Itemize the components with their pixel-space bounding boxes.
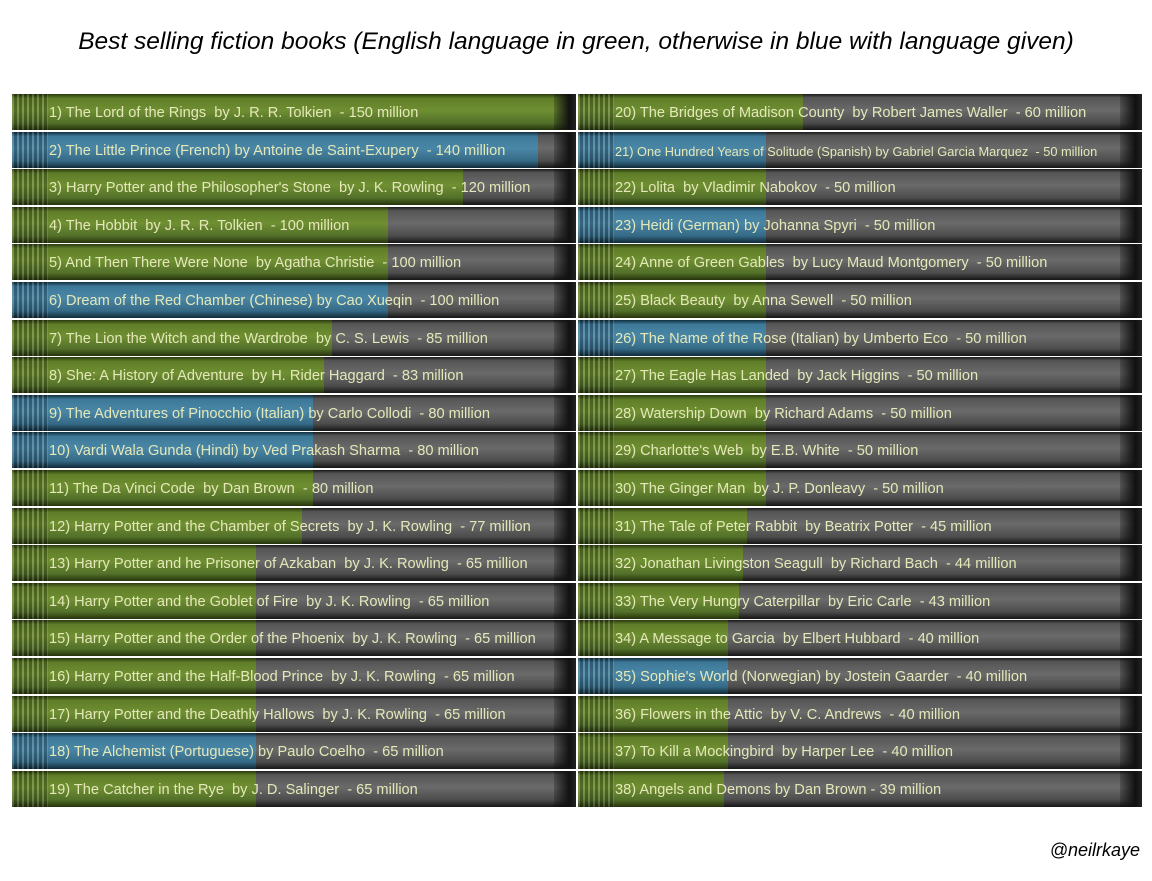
panel: left column of book spines: 17) Harry Potter and the Deathly Hallows by J. K. Rowling - 65 million — [49, 707, 506, 723]
panel: left column of book spines: 18) The Alchemist (Portuguese) by Paulo Coelho - 65 million — [49, 744, 444, 760]
panel: left column of book spines: 3) Harry Potter and the Philosopher's Stone by J. K. Rowling - 120 million — [49, 180, 530, 196]
panel: left column of book spines: 7) The Lion the Witch and the Wardrobe by C. S. Lewis - 85 million — [49, 331, 488, 347]
panel: right column of book spines: 22) Lolita by Vladimir Nabokov - 50 million — [615, 180, 896, 196]
panel: right column of book spines: 23) Heidi (German) by Johanna Spyri - 50 million — [615, 218, 935, 234]
panel: left column of book spines: 15) Harry Potter and the Order of the Phoenix by J. K. Rowling - 65 million — [49, 631, 536, 647]
panel: right column of book spines: 36) Flowers in the Attic by V. C. Andrews - 40 million — [615, 707, 960, 723]
panel: left column of book spines: 9) The Adventures of Pinocchio (Italian) by Carlo Collodi - 80 million — [49, 406, 490, 422]
panel: left column of book spines: 19) The Catcher in the Rye by J. D. Salinger - 65 million — [49, 782, 418, 798]
panel: left column of book spines: 2) The Little Prince (French) by Antoine de Saint-Exupery - 140 million — [49, 143, 505, 159]
panel: left column of book spines: 12) Harry Potter and the Chamber of Secrets by J. K. Rowling - 77 million — [49, 519, 531, 535]
panel: right column of book spines: 37) To Kill a Mockingbird by Harper Lee - 40 million — [615, 744, 953, 760]
panel: left column of book spines: 14) Harry Potter and the Goblet of Fire by J. K. Rowling - 65 million — [49, 594, 489, 610]
panel: left column of book spines — [12, 94, 576, 807]
panel: right column of book spines: 35) Sophie's World (Norwegian) by Jostein Gaarder - 40 million — [615, 669, 1027, 685]
panel: right column of book spines — [578, 94, 1142, 807]
panel: left column of book spines: 5) And Then There Were None by Agatha Christie - 100 million — [49, 255, 461, 271]
panel: right column of book spines: 26) The Name of the Rose (Italian) by Umberto Eco - 50 million — [615, 331, 1027, 347]
panel: right column of book spines: 33) The Very Hungry Caterpillar by Eric Carle - 43 million — [615, 594, 990, 610]
panel: right column of book spines: 24) Anne of Green Gables by Lucy Maud Montgomery - 50 million — [615, 255, 1047, 271]
panel: right column of book spines: 21) One Hundred Years of Solitude (Spanish) by Gabriel Garcia Marquez - 50 million — [615, 144, 1097, 159]
panel: right column of book spines: 28) Watership Down by Richard Adams - 50 million — [615, 406, 952, 422]
title: Best selling fiction books (English language in green, otherwise in blue with language given) — [78, 28, 1074, 55]
panel: left column of book spines: 8) She: A History of Adventure by H. Rider Haggard - 83 million — [49, 368, 464, 384]
panel: left column of book spines: 11) The Da Vinci Code by Dan Brown - 80 million — [49, 481, 373, 497]
panel: right column of book spines: 38) Angels and Demons by Dan Brown - 39 million — [615, 782, 941, 798]
panel: right column of book spines: 20) The Bridges of Madison County by Robert James Waller - 60 million — [615, 105, 1086, 121]
panel: left column of book spines: 4) The Hobbit by J. R. R. Tolkien - 100 million — [49, 218, 349, 234]
panel: right column of book spines: 31) The Tale of Peter Rabbit by Beatrix Potter - 45 million — [615, 519, 992, 535]
panel: left column of book spines: 10) Vardi Wala Gunda (Hindi) by Ved Prakash Sharma - 80 million — [49, 443, 479, 459]
panel: right column of book spines: 27) The Eagle Has Landed by Jack Higgins - 50 million — [615, 368, 978, 384]
panel: right column of book spines: 30) The Ginger Man by J. P. Donleavy - 50 million — [615, 481, 944, 497]
panel: left column of book spines: 13) Harry Potter and he Prisoner of Azkaban by J. K. Rowling - 65 million — [49, 556, 528, 572]
panel: left column of book spines: 16) Harry Potter and the Half-Blood Prince by J. K. Rowling - 65 million — [49, 669, 515, 685]
panel: right column of book spines: 34) A Message to Garcia by Elbert Hubbard - 40 million — [615, 631, 979, 647]
panel: left column of book spines: 1) The Lord of the Rings by J. R. R. Tolkien - 150 million — [49, 105, 418, 121]
panel: right column of book spines: 25) Black Beauty by Anna Sewell - 50 million — [615, 293, 912, 309]
panel: right column of book spines: 29) Charlotte's Web by E.B. White - 50 million — [615, 443, 918, 459]
credit: @neilrkaye — [1050, 840, 1140, 860]
panel: right column of book spines: 32) Jonathan Livingston Seagull by Richard Bach - 44 million — [615, 556, 1017, 572]
panel: left column of book spines: 6) Dream of the Red Chamber (Chinese) by Cao Xueqin - 100 million — [49, 293, 499, 309]
